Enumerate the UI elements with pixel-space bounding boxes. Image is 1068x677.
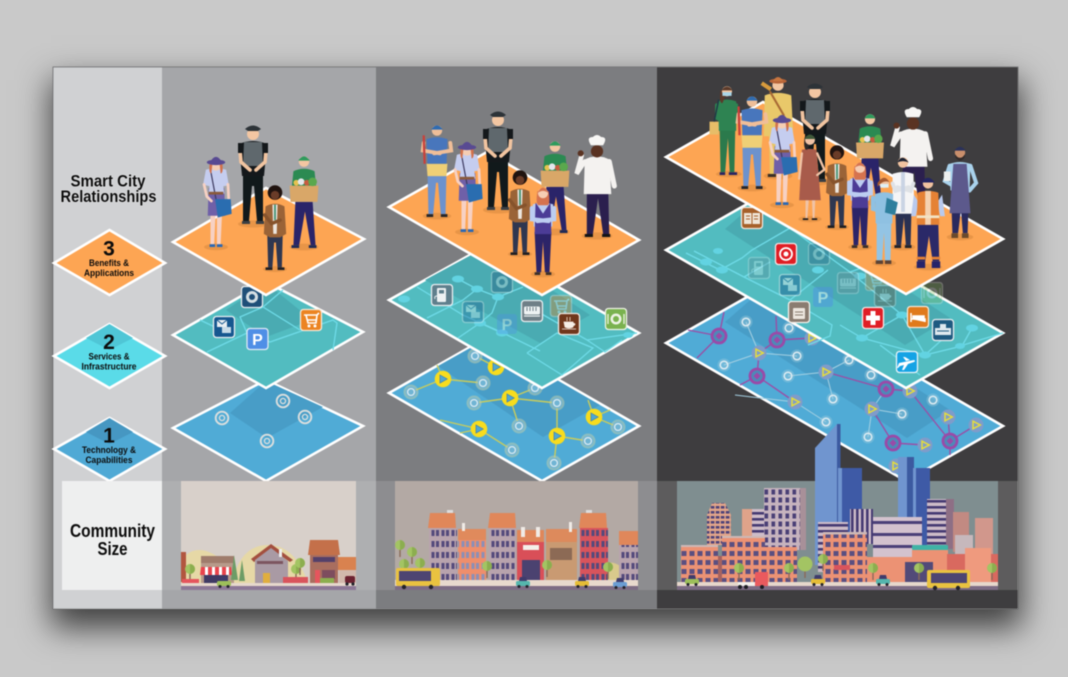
people group xyxy=(203,126,318,272)
legend diamond 2: Services & Infrastructure: Services & xyxy=(88,352,130,362)
layer 1: technology xyxy=(173,380,363,481)
heading: Community Size xyxy=(62,481,162,590)
person: mail carrier xyxy=(769,115,798,208)
heading: Smart City Relationships: Smart City xyxy=(70,172,146,190)
person: grocer xyxy=(290,156,318,250)
icon: fire station xyxy=(776,244,796,264)
icon: mail xyxy=(214,316,234,338)
icon: coffee xyxy=(558,314,580,334)
truck xyxy=(738,572,768,589)
ghost icons: mail and parking: P xyxy=(818,290,829,307)
person: business woman xyxy=(825,145,849,230)
person: nurse xyxy=(872,178,898,266)
person: police officer xyxy=(483,112,513,214)
legend diamond 3: Benefits & Applications xyxy=(54,230,165,295)
heading: Smart City Relationships xyxy=(60,172,156,206)
layer 3: benefits xyxy=(389,152,639,295)
city illustration: town xyxy=(395,481,638,590)
person: police officer xyxy=(800,84,830,186)
icon: luggage xyxy=(788,302,810,322)
ghost icons from previous tiers xyxy=(748,244,942,306)
person: mail carrier xyxy=(203,157,232,250)
person: business woman xyxy=(263,185,287,272)
layer 2: services map xyxy=(389,246,639,388)
person: plumber xyxy=(423,125,451,219)
person: business woman xyxy=(508,170,532,257)
legend diamond 2: Services & Infrastructure xyxy=(54,324,165,388)
person: chef xyxy=(892,107,931,213)
icon: restaurant xyxy=(606,308,626,330)
person: woman in dress xyxy=(798,134,824,222)
person: grocer xyxy=(856,114,884,205)
ghost icons from previous tier: P xyxy=(502,317,513,334)
layer 2: services xyxy=(173,282,363,388)
panel: small community column xyxy=(173,126,364,590)
city illustration: metropolis xyxy=(677,424,998,590)
person: firefighter xyxy=(762,77,793,180)
icon: parking xyxy=(247,328,268,350)
layer 1: technology network xyxy=(389,338,639,481)
layer 1: technology network xyxy=(666,288,1003,481)
icon: library xyxy=(742,208,762,228)
legend diamond 1: Technology & Capabilities: 1 xyxy=(103,424,115,448)
icon: airport xyxy=(896,352,918,372)
people group xyxy=(710,77,976,270)
layer 2: services map xyxy=(666,195,1003,388)
person: grocer xyxy=(541,141,569,235)
legend diamond 2: Services & Infrastructure: Infrastructure xyxy=(82,362,136,372)
person: doctor xyxy=(891,157,915,250)
people group xyxy=(423,112,614,277)
icon: parking: P xyxy=(252,332,263,349)
person: chef xyxy=(577,135,614,240)
icon: bus xyxy=(522,300,542,322)
icon: hospital xyxy=(862,308,884,328)
icon: hotel xyxy=(908,306,928,328)
heading: Smart City Relationships: Relationships xyxy=(60,188,156,206)
icon: gas station xyxy=(432,284,452,306)
layer 3: benefits xyxy=(666,102,1003,294)
person: mail carrier xyxy=(454,142,483,235)
person: construction worker xyxy=(911,178,945,270)
layer 3: benefits xyxy=(173,188,364,295)
icon: shopping cart xyxy=(300,310,322,330)
person: student xyxy=(848,162,872,250)
ghost icons from previous tier xyxy=(462,272,572,334)
person: student xyxy=(531,188,555,277)
person: barista xyxy=(944,147,976,240)
legend diamond 3: Benefits & Applications: Applications xyxy=(84,268,134,279)
city illustration: small town xyxy=(181,481,356,590)
bus xyxy=(927,570,970,590)
legend diamond 1: Technology & Capabilities: Capabilities xyxy=(86,455,132,466)
legend diamond 1: Technology & Capabilities xyxy=(54,418,165,481)
panel: column backgrounds xyxy=(53,67,1018,609)
person: medic xyxy=(710,86,742,177)
panel: large community column xyxy=(666,77,1003,590)
heading: Community Size: Size xyxy=(98,539,128,559)
skyscrapers rising above the image xyxy=(815,424,930,568)
legend diamond 2: Services & Infrastructure: 2 xyxy=(103,331,115,354)
panel: row labels xyxy=(54,172,165,590)
person: police officer xyxy=(238,126,268,228)
bus xyxy=(396,568,440,589)
person: plumber xyxy=(738,96,766,191)
heading: Community Size: Community xyxy=(70,521,155,541)
legend diamond 3: Benefits & Applications: 3 xyxy=(103,238,115,260)
icon: camera xyxy=(242,286,262,308)
card backdrop xyxy=(53,67,1018,609)
ghost icons: mail and parking xyxy=(780,274,833,307)
panel: medium community column xyxy=(389,112,639,590)
legend diamond 3: Benefits & Applications: Benefits & xyxy=(89,258,129,269)
icon: train xyxy=(932,320,954,340)
legend diamond 1: Technology & Capabilities: Technology & xyxy=(82,445,136,456)
